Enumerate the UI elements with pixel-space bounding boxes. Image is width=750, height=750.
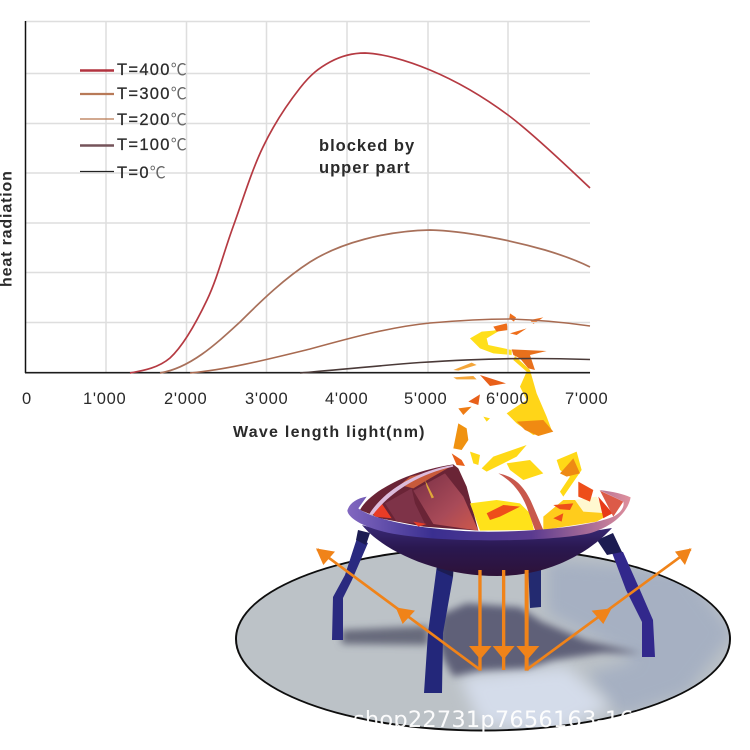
arrows: downward heat xyxy=(469,570,539,671)
shadow under the fire pit xyxy=(342,603,642,677)
right wall xyxy=(600,491,623,517)
curve: T=0 baseline xyxy=(25,372,590,374)
annotation: blocked by upper part: upper part xyxy=(319,159,411,177)
annotation: blocked by upper part: blocked by xyxy=(319,137,415,155)
curve: T=100 xyxy=(300,358,590,373)
bowl rim xyxy=(347,490,631,540)
x axis tick labels: 3'000 xyxy=(245,390,288,408)
curve: T=300 xyxy=(160,230,590,373)
x axis tick labels: 1'000 xyxy=(83,390,126,408)
heat radiation chart xyxy=(0,21,608,441)
x axis tick labels: 6'000 xyxy=(486,390,529,408)
bowl interior xyxy=(360,464,478,531)
fire pit xyxy=(332,313,655,693)
flame tips xyxy=(470,328,512,355)
x axis tick labels: 4'000 xyxy=(325,390,368,408)
back leg xyxy=(528,565,541,608)
x axis tick labels: 5'000 xyxy=(404,390,447,408)
y axis xyxy=(24,21,26,373)
right leg xyxy=(611,550,655,657)
reflection arrows xyxy=(316,548,692,671)
mat shading xyxy=(547,560,733,717)
x axis tick labels: 0 xyxy=(22,390,32,408)
x axis tick labels: 7'000 xyxy=(565,390,608,408)
watermark: shop22731p7656163-16 xyxy=(353,707,634,733)
curve: T=200 xyxy=(190,319,590,373)
legend: T=0℃ xyxy=(117,164,166,182)
x axis tick labels: 2'000 xyxy=(164,390,207,408)
annotation: blocked by upper part xyxy=(319,137,415,177)
legend: T=100℃ xyxy=(117,136,187,154)
legend: T=400℃ xyxy=(117,61,187,79)
bowl xyxy=(362,525,612,576)
arrow: reflected left xyxy=(316,548,480,670)
left leg xyxy=(332,538,368,640)
arrow: reflected right xyxy=(527,548,692,670)
flames and coals xyxy=(360,313,623,532)
legend: T=300℃ xyxy=(117,85,187,103)
legend: T=200℃ xyxy=(117,111,187,129)
x axis title: Wave length light(nm) xyxy=(233,424,426,441)
flame white core xyxy=(452,313,613,532)
curve: T=400 xyxy=(130,53,590,373)
heat reflective mat xyxy=(235,546,733,733)
front leg xyxy=(424,565,453,693)
legend xyxy=(80,61,187,182)
flame middle patches xyxy=(470,417,582,497)
x axis tick labels xyxy=(22,390,608,408)
leg brackets xyxy=(356,530,622,577)
